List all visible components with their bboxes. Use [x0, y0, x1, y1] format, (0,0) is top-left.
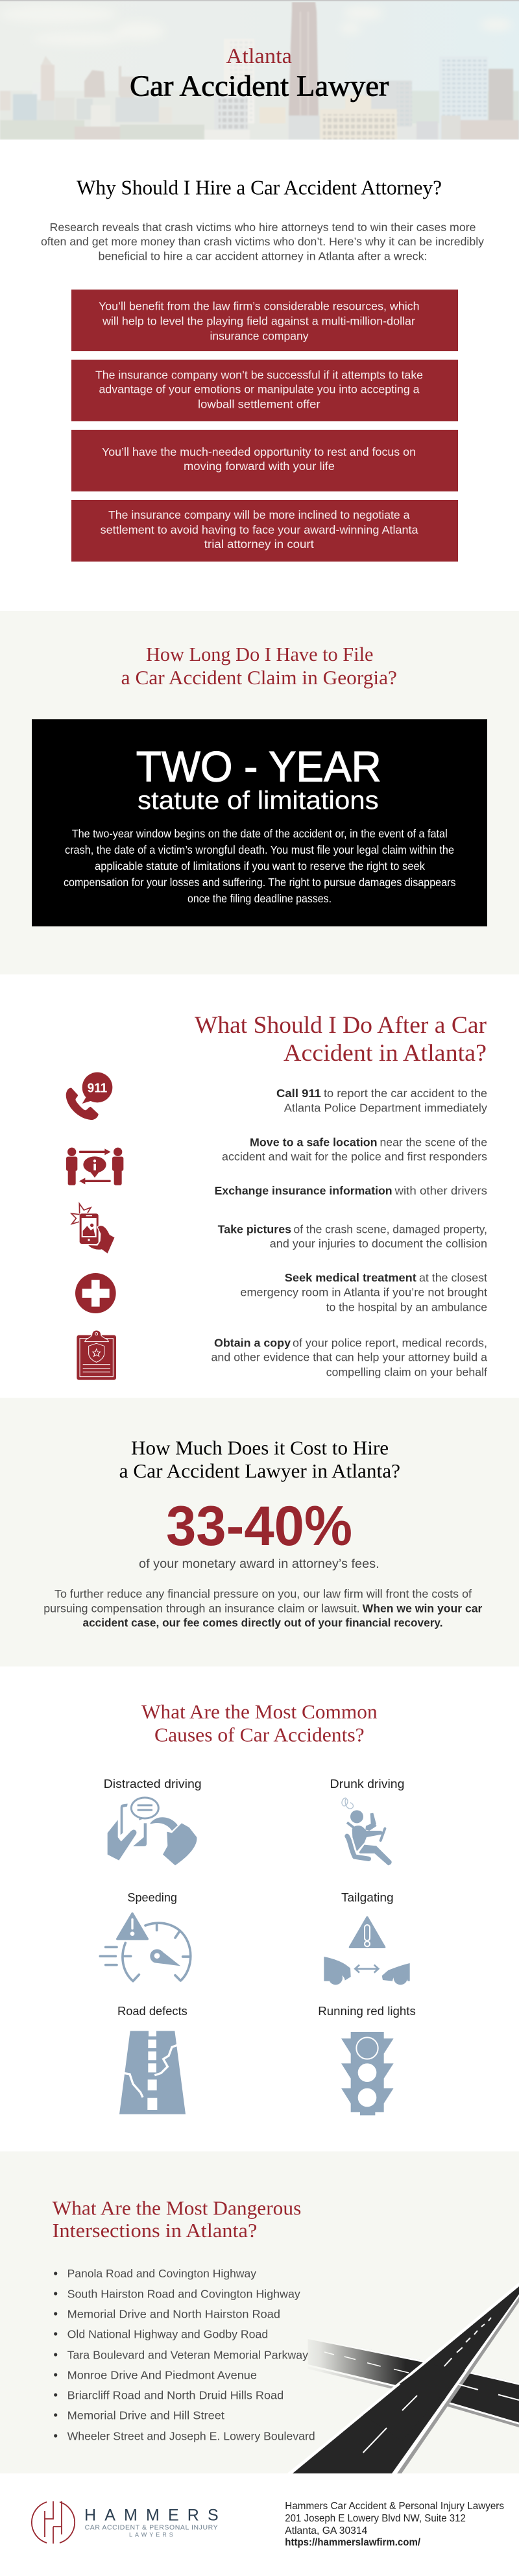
step: seek medical treatment: to the hospital by an ambulance: [326, 1301, 487, 1314]
statute explanation: compensation for your losses and suffering. The right to pursue damages disappears: [64, 876, 456, 889]
logo wordmark: HAMMERS: [84, 2506, 219, 2524]
statute explanation: applicable statute of limitations if you want to reserve the right to seek: [95, 860, 425, 873]
intersections list: Old National Highway and Godby Road: [67, 2328, 268, 2341]
cause: tailgating: [324, 1890, 410, 1985]
intro paragraph: [41, 221, 484, 263]
step: obtain a copy: and other evidence that can help your attorney build a: [211, 1351, 487, 1364]
cause: speeding: [100, 1890, 191, 1981]
step: obtain a copy: compelling claim on your behalf: [326, 1366, 487, 1379]
cause: drunk driving: Drunk driving: [330, 1777, 405, 1790]
callout: insurance tactics: advantage of your emotions or manipulate you into accepting a: [99, 382, 420, 395]
heading: [195, 1012, 487, 1067]
intro paragraph: Research reveals that crash victims who hire attorneys tend to win their cases more: [49, 221, 476, 234]
panel: header with Atlanta skyline: [0, 0, 519, 140]
black statute card: [32, 719, 487, 926]
intro paragraph: beneficial to hire a car accident attorney in Atlanta after a wreck:: [99, 250, 427, 263]
icon: phone 911: 911: [88, 1081, 107, 1096]
callout: negotiate settlement: [71, 500, 458, 562]
callout: negotiate settlement: trial attorney in court: [204, 538, 314, 551]
icon: phone 911: [66, 1072, 112, 1120]
heading: How Long Do I Have to File: [146, 643, 374, 665]
step: take pictures: and your injuries to document the collision: [270, 1237, 487, 1250]
cause: road defects: [117, 2004, 187, 2114]
intersections list: Tara Boulevard and Veteran Memorial Parkway: [67, 2349, 308, 2362]
heading: [53, 2197, 301, 2242]
contact details: https://hammerslawfirm.com/: [285, 2537, 421, 2548]
heading: a Car Accident Lawyer in Atlanta?: [119, 1459, 400, 1482]
heading: Atlanta: Atlanta: [226, 45, 292, 68]
intersections list: [54, 2267, 315, 2442]
heading: Accident in Atlanta?: [284, 1040, 487, 1067]
icon: medical cross: [75, 1273, 116, 1313]
callout: insurance tactics: lowball settlement offer: [198, 397, 320, 410]
big number: fee percentage: 33-40%: [166, 1495, 352, 1557]
step: obtain a copy: Obtain a copy: [214, 1337, 291, 1350]
step: call 911: [276, 1087, 487, 1114]
statute explanation: once the filing deadline passes.: [187, 892, 332, 905]
panel: statute of limitations: [0, 611, 519, 974]
step: take pictures: [218, 1223, 487, 1250]
contact details: 201 Joseph E Lowery Blvd NW, Suite 312: [285, 2513, 466, 2524]
heading: Why Should I Hire a Car Accident Attorney?: [77, 175, 442, 199]
heading: [141, 1700, 378, 1746]
intersections list: South Hairston Road and Covington Highway: [67, 2288, 300, 2301]
cause: running red lights: [318, 2004, 416, 2115]
intersections list: Monroe Drive And Piedmont Avenue: [67, 2368, 257, 2381]
cause: speeding: Speeding: [127, 1890, 177, 1904]
intersections list: Panola Road and Covington Highway: [67, 2267, 256, 2280]
road intersection illustration: [288, 2283, 519, 2473]
heading: [119, 1437, 400, 1482]
step: move to a safe location: Move to a safe location: [250, 1136, 378, 1149]
callout: insurance tactics: The insurance company won’t be successful if it attempts to take: [95, 368, 423, 381]
callout: resources: You’ll benefit from the law firm’s considerable resources, which: [99, 300, 419, 313]
statute explanation: The two-year window begins on the date of the accident or, in the event of a fatal: [72, 827, 448, 840]
intersections list: Briarcliff Road and North Druid Hills Road: [67, 2388, 284, 2401]
step: take pictures: Take pictures: [218, 1223, 291, 1236]
step: move to a safe location: near the scene of the: [380, 1136, 487, 1149]
callout: negotiate settlement: The insurance company will be more inclined to negotiate a: [108, 508, 410, 521]
statute explanation: [64, 827, 456, 905]
contact details: [285, 2501, 504, 2548]
intro paragraph: often and get more money than crash victims who don’t. Here’s why it can be incredibly: [41, 235, 484, 248]
heading: Intersections in Atlanta?: [53, 2219, 257, 2242]
grey top line: [0, 0, 519, 1]
cause: distracted driving: [104, 1777, 202, 1865]
callout: negotiate settlement: settlement to avoid having to face your award-winning Atlanta: [101, 523, 418, 536]
icon: take pictures: [71, 1204, 115, 1254]
heading: What Are the Most Dangerous: [53, 2197, 301, 2220]
logo tagline: CAR ACCIDENT & PERSONAL INJURY: [85, 2524, 218, 2532]
contact details: Hammers Car Accident & Personal Injury Lawyers: [285, 2501, 504, 2512]
callout: rest and focus: moving forward with your life: [184, 460, 335, 473]
step: seek medical treatment: emergency room in Atlanta if you’re not brought: [240, 1286, 487, 1299]
heading: [121, 643, 397, 689]
step: move to a safe location: accident and wait for the police and first responders: [222, 1150, 487, 1163]
intersections list: Memorial Drive and Hill Street: [67, 2409, 224, 2421]
step: move to a safe location: [222, 1136, 487, 1163]
icon: phone and steering wheel: [108, 1798, 197, 1865]
logo mark: [32, 2501, 75, 2544]
fee explanation: To further reduce any financial pressure on you, our law firm will front the costs of: [54, 1587, 472, 1600]
fee explanation: pursuing compensation through an insurance claim or lawsuit.: [43, 1602, 360, 1615]
heading: Car Accident Lawyer: Car Accident Lawyer: [130, 69, 389, 103]
fee explanation: accident case, our fee comes directly out of your financial recovery.: [83, 1616, 442, 1629]
heading: How Much Does it Cost to Hire: [131, 1437, 389, 1459]
step: call 911: Call 911: [276, 1087, 321, 1100]
icon: drunk driver: [342, 1798, 392, 1865]
icon: police report clipboard: [77, 1330, 116, 1380]
heading: a Car Accident Claim in Georgia?: [121, 666, 397, 689]
intersections list: Memorial Drive and North Hairston Road: [67, 2308, 280, 2321]
panel: what to do after an accident: [66, 1012, 487, 1380]
step: seek medical treatment: [240, 1271, 487, 1314]
callout: insurance tactics: [71, 360, 458, 421]
icon: speedometer: [100, 1913, 191, 1981]
step: take pictures: of the crash scene, damaged property,: [293, 1223, 487, 1236]
cause: road defects: Road defects: [117, 2004, 187, 2018]
step: seek medical treatment: Seek medical treatment: [285, 1271, 416, 1284]
callout: rest and focus: [71, 430, 458, 491]
heading: What Are the Most Common: [141, 1700, 378, 1723]
step: exchange insurance information: [215, 1184, 487, 1197]
intersections list: Wheeler Street and Joseph E. Lowery Boulevard: [67, 2429, 315, 2442]
fee explanation: When we win your car: [363, 1602, 483, 1615]
fee caption: of your monetary award in attorney’s fees.: [139, 1557, 380, 1571]
cause: distracted driving: Distracted driving: [104, 1777, 202, 1790]
logo sub tagline: LAWYERS: [129, 2532, 173, 2538]
panel: footer: [32, 2501, 504, 2548]
callout: rest and focus: You’ll have the much-needed opportunity to rest and focus on: [102, 445, 416, 458]
step: obtain a copy: [211, 1337, 487, 1379]
panel: cost of a lawyer: [0, 1398, 519, 1666]
callout: resources: will help to level the playing field against a multi-million-dollar: [102, 314, 415, 327]
icon: safe location: [66, 1148, 123, 1185]
cause: tailgating: Tailgating: [341, 1890, 394, 1904]
step: call 911: to report the car accident to the: [324, 1087, 487, 1100]
skyline photo: [0, 0, 519, 140]
fee explanation: [43, 1587, 483, 1629]
callout: resources: [71, 290, 458, 351]
heading: Causes of Car Accidents?: [154, 1724, 365, 1746]
icon: warning and two cars: [324, 1917, 410, 1985]
step: exchange insurance information: Exchange insurance information: [215, 1184, 392, 1197]
icon: cracked road: [119, 2031, 186, 2114]
callout: resources: insurance company: [210, 329, 309, 342]
statute explanation: crash, the date of a victim’s wrongful death. You must file your legal claim within the: [65, 843, 454, 856]
cause: drunk driving: [330, 1777, 405, 1865]
step: exchange insurance information: with other drivers: [394, 1184, 487, 1197]
logo: Hammers: [32, 2501, 219, 2544]
icon: traffic light: [341, 2032, 394, 2115]
sub label: statute of limitations: statute of limitations: [138, 787, 379, 815]
panel: common causes: [100, 1700, 416, 2115]
cause: running red lights: Running red lights: [318, 2004, 416, 2018]
step: seek medical treatment: at the closest: [419, 1271, 487, 1284]
contact details: Atlanta, GA 30314: [285, 2525, 368, 2536]
big label: two-year: TWO - YEAR: [136, 742, 381, 790]
panel: why hire an attorney: [41, 175, 484, 562]
heading: What Should I Do After a Car: [195, 1012, 487, 1039]
step: obtain a copy: of your police report, medical records,: [293, 1337, 487, 1350]
panel: dangerous intersections: [0, 2151, 519, 2473]
step: call 911: Atlanta Police Department immediately: [284, 1101, 487, 1114]
